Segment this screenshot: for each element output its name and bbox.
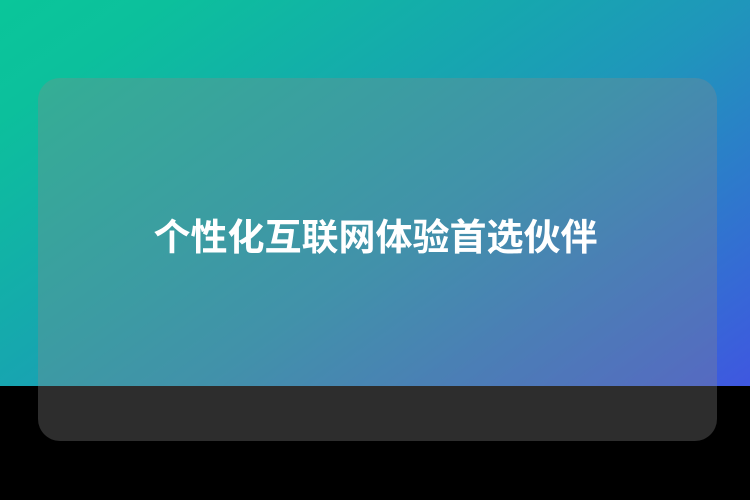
gradient background bbox=[0, 0, 750, 386]
title: 个性化互联网体验首选伙伴 bbox=[154, 217, 598, 258]
translucent card panel bbox=[38, 78, 717, 441]
